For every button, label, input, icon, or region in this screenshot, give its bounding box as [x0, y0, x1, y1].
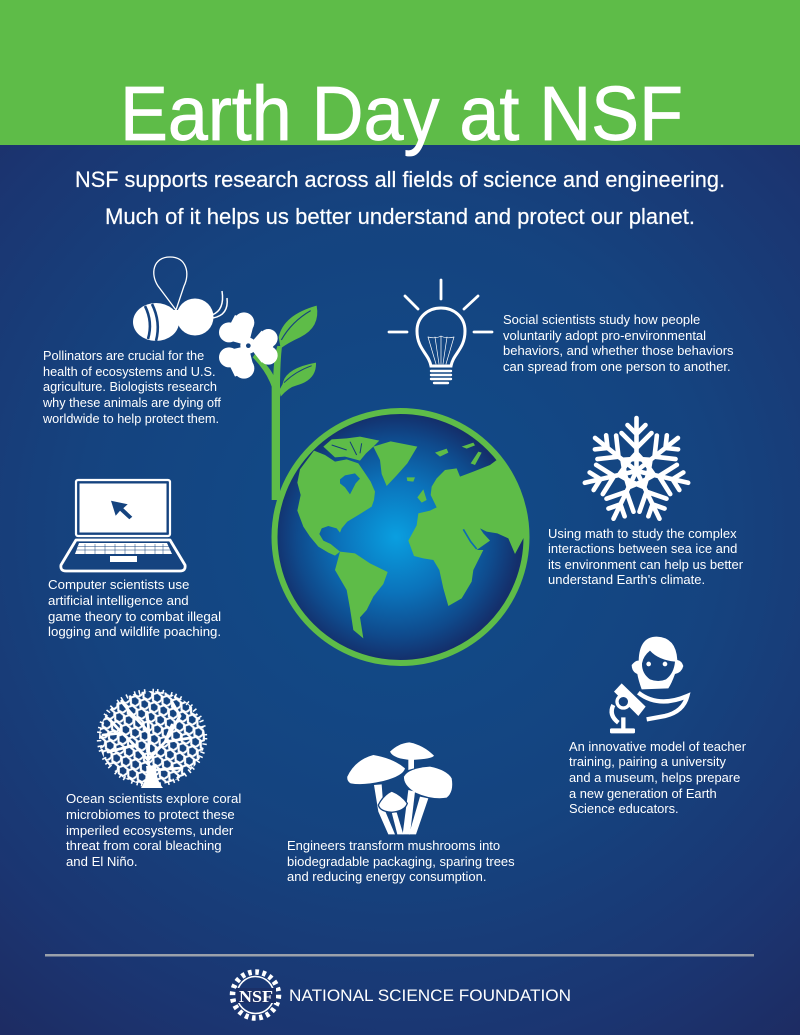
- footer wordmark: NATIONAL SCIENCE FOUNDATION: [289, 986, 571, 1005]
- ocean scientists text: imperiled ecosystems, under: [66, 823, 234, 838]
- social scientists text: Social scientists study how people: [503, 312, 700, 327]
- computer scientists text: logging and wildlife poaching.: [48, 624, 221, 639]
- computer scientists text: Computer scientists use: [48, 577, 189, 592]
- sea ice text: [548, 526, 744, 587]
- teacher training text: a new generation of Earth: [569, 786, 717, 801]
- engineers text: biodegradable packaging, sparing trees: [287, 854, 515, 869]
- plant stem and leaves: [253, 306, 317, 500]
- icon: scientist with microscope: [610, 637, 687, 733]
- sea ice text: its environment can help us better: [548, 557, 744, 572]
- computer scientists text: game theory to combat illegal: [48, 609, 221, 624]
- intro text: [75, 167, 725, 229]
- social scientists text: behaviors, and whether those behaviors: [503, 343, 734, 358]
- sea ice text: understand Earth's climate.: [548, 572, 705, 587]
- social scientists text: voluntarily adopt pro-environmental: [503, 328, 706, 343]
- footer divider: [45, 954, 754, 956]
- ocean scientists text: microbiomes to protect these: [66, 807, 235, 822]
- ocean scientists text: Ocean scientists explore coral: [66, 791, 241, 806]
- globe: [274, 411, 531, 663]
- social scientists text: can spread from one person to another.: [503, 359, 731, 374]
- title: Earth Day at NSF: [120, 71, 683, 157]
- teacher training text: and a museum, helps prepare: [569, 770, 740, 785]
- pollinators text: why these animals are dying off: [42, 395, 221, 410]
- teacher training text: training, pairing a university: [569, 754, 726, 769]
- intro text: Much of it helps us better understand and protect our planet.: [105, 204, 695, 229]
- icon: bee: [133, 257, 227, 341]
- nsf logo: [232, 972, 278, 1018]
- icon: coral: [96, 688, 208, 788]
- teacher training text: [569, 739, 747, 816]
- ocean scientists text: and El Niño.: [66, 854, 138, 869]
- engineers text: and reducing energy consumption.: [287, 869, 486, 884]
- pollinators text: health of ecosystems and U.S.: [43, 364, 216, 379]
- engineers text: Engineers transform mushrooms into: [287, 838, 500, 853]
- pollinators text: [42, 348, 221, 426]
- sea ice text: Using math to study the complex: [548, 526, 737, 541]
- icon: laptop: [61, 480, 185, 571]
- icon: flower: [219, 312, 278, 379]
- nsf logo: NSF: [239, 987, 273, 1006]
- teacher training text: Science educators.: [569, 801, 679, 816]
- computer scientists text: artificial intelligence and: [48, 593, 189, 608]
- sea ice text: interactions between sea ice and: [548, 541, 737, 556]
- icon: snowflake: [581, 418, 692, 525]
- engineers text: [287, 838, 515, 884]
- social scientists text: [503, 312, 734, 374]
- ocean scientists text: threat from coral bleaching: [66, 838, 222, 853]
- pollinators text: worldwide to help protect them.: [42, 411, 219, 426]
- intro text: NSF supports research across all fields of science and engineering.: [75, 167, 725, 192]
- ocean scientists text: [66, 791, 241, 869]
- icon: mushrooms: [347, 742, 452, 834]
- teacher training text: An innovative model of teacher: [569, 739, 747, 754]
- computer scientists text: [48, 577, 221, 639]
- pollinators text: Pollinators are crucial for the: [43, 348, 204, 363]
- icon: light bulb: [389, 280, 492, 383]
- green header band: [0, 0, 800, 145]
- pollinators text: agriculture. Biologists research: [43, 379, 217, 394]
